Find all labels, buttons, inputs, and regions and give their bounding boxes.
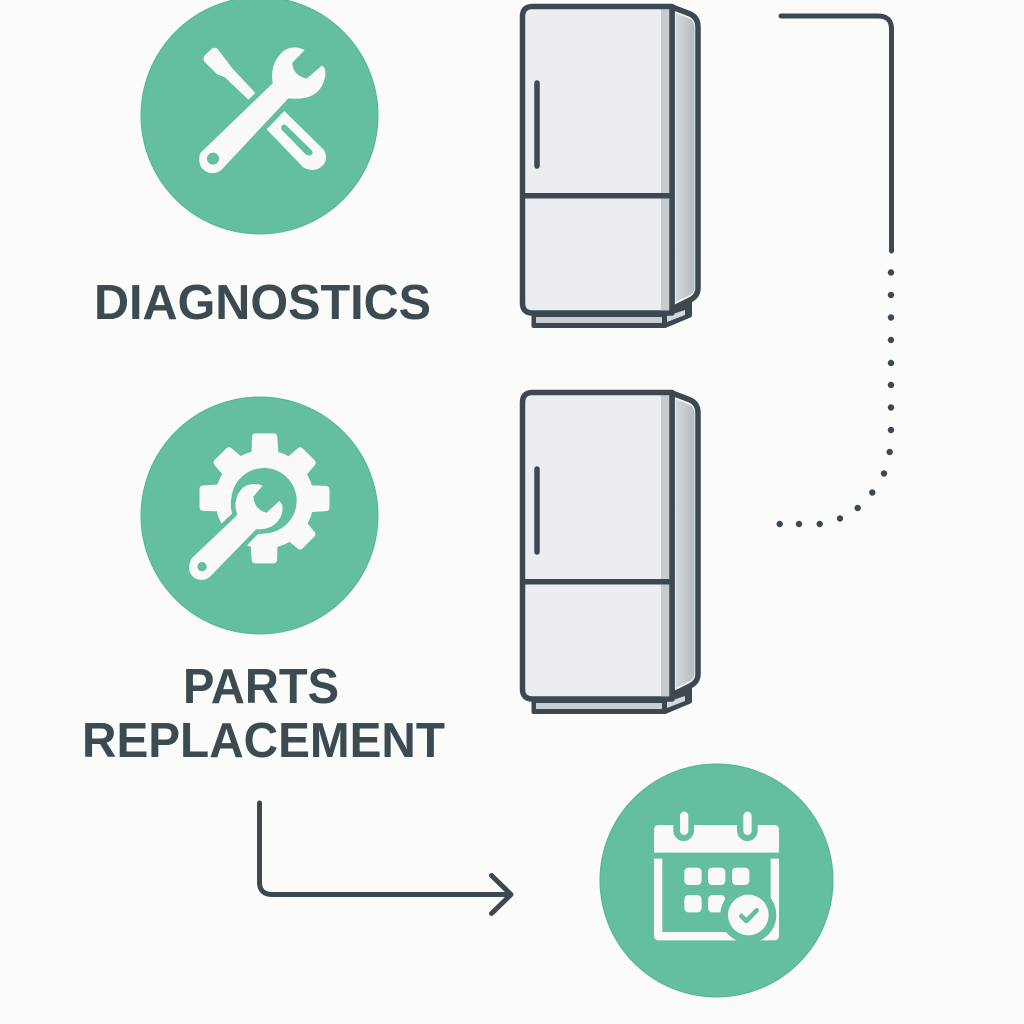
heading: parts replacement [82,659,445,768]
illustration: top refrigerator [522,6,698,326]
icon: calendar with check in green circle [600,764,833,997]
icon: parts replacement gear and wrench in green circle [141,397,378,634]
icon: wrench [199,47,325,173]
icon: calendar day grid [684,868,749,912]
heading: diagnostics: DIAGNOSTICS [94,275,431,330]
icon: diagnostics tools in green circle [141,0,378,234]
icon: screwdriver blade [203,48,255,100]
connector: solid line from top fridge [781,16,892,251]
illustration: lower refrigerator [522,392,698,712]
icon: check badge [720,887,776,943]
arrow: parts replacement to schedule [260,803,511,914]
icon: small wrench [189,484,283,580]
connector: dotted line curving to lower fridge [776,269,894,527]
icon: calendar header [654,825,779,853]
icon: calendar body [654,859,779,940]
icon: gear [199,433,329,563]
icon: calendar binder rings [673,812,758,841]
heading: parts replacement: REPLACEMENT [82,713,445,768]
icon: screwdriver handle [267,111,326,170]
heading: parts replacement: PARTS [183,659,339,714]
